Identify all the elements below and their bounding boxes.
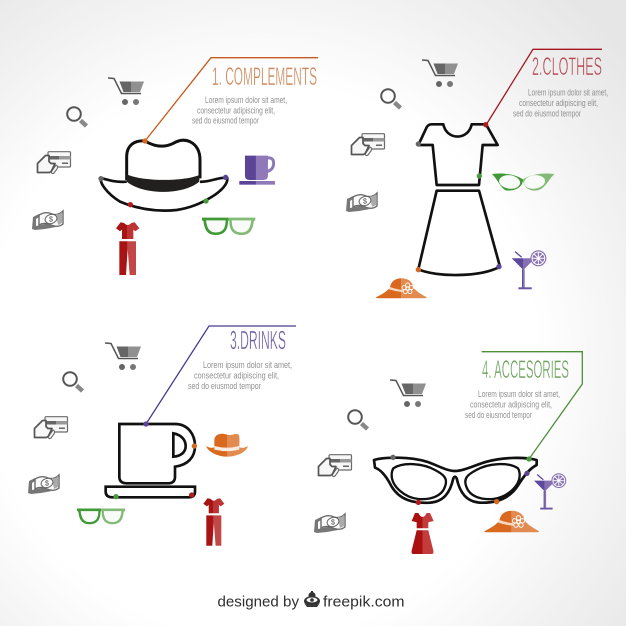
illustration: glasses <box>374 455 537 505</box>
text block: accessories <box>465 389 560 421</box>
icon: mug <box>239 156 275 185</box>
icon: card payment <box>34 417 68 439</box>
text block: drinks <box>188 360 292 392</box>
leader line: complements <box>145 58 318 141</box>
icon: freepik logo <box>304 591 320 607</box>
icon: outfit <box>116 222 139 275</box>
icon: cat-eye glasses <box>492 173 554 191</box>
icon: money <box>28 475 59 494</box>
icon: cocktail <box>512 250 546 289</box>
icon: cart <box>390 380 426 407</box>
text block: complements: Lorem ipsum dolor sit amet, <box>205 95 287 106</box>
text block: accessories: sed do eiusmod tempor <box>465 410 532 421</box>
icon: fedora <box>206 434 248 457</box>
icon: cart <box>108 78 144 105</box>
text block: accessories: Lorem ipsum dolor sit amet, <box>478 389 560 400</box>
icon: glasses <box>77 509 125 524</box>
icon: money <box>346 193 377 212</box>
illustration: hat <box>98 138 228 211</box>
panel: accessories <box>314 352 582 554</box>
text block: complements <box>192 95 287 126</box>
icon: money <box>32 211 63 230</box>
footer credit <box>218 591 404 610</box>
icon: sun hat <box>484 511 539 532</box>
icon: money <box>314 514 345 533</box>
panel: complements <box>32 58 318 275</box>
icon: sun hat <box>376 278 427 298</box>
icon: card payment <box>38 152 70 174</box>
leader line: accessories <box>482 352 582 459</box>
illustration: mug <box>106 421 197 499</box>
icon: magnifier <box>381 89 400 108</box>
footer credit: designed by <box>218 594 300 610</box>
text block: clothes <box>513 87 608 120</box>
leader line: clothes <box>486 49 602 125</box>
panel: drinks: 3.DRINKS <box>230 325 286 355</box>
text block: clothes: sed do eiusmod tempor <box>513 108 581 120</box>
icon: magnifier <box>67 107 86 126</box>
icon: dress <box>412 513 434 554</box>
leader line: drinks <box>146 326 296 424</box>
icon: card payment <box>318 455 352 477</box>
text: 1. COMPLEMENTS <box>212 63 317 91</box>
text block: complements: sed do eiusmod tempor <box>192 116 259 126</box>
footer credit: freepik.com <box>323 594 404 610</box>
icon: cart <box>105 343 141 370</box>
icon: magnifier <box>63 372 82 391</box>
text block: accessories: consectetur adipiscing elit, <box>470 400 552 411</box>
icon: cocktail <box>534 473 566 510</box>
text block: drinks: consectetur adipiscing elit, <box>194 370 279 382</box>
icon: card payment <box>352 134 384 156</box>
panel: drinks <box>28 325 296 546</box>
panel: clothes <box>346 49 608 298</box>
icon: outfit <box>203 498 224 546</box>
icon: cart <box>422 60 458 87</box>
icon: glasses <box>202 218 255 235</box>
text block: drinks: Lorem ipsum dolor sit amet, <box>203 360 292 371</box>
illustration: dress <box>416 122 502 275</box>
icon: magnifier <box>348 410 368 429</box>
text block: complements: consectetur adipiscing elit, <box>197 106 275 116</box>
text block: drinks: sed do eiusmod tempor <box>188 381 261 392</box>
